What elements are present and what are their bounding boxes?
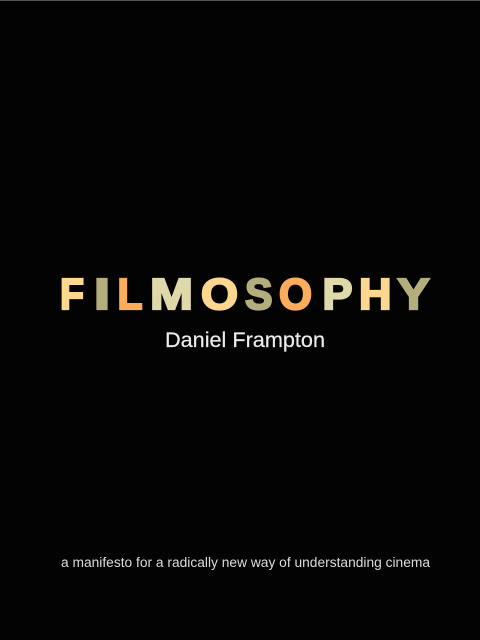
title: FILMOSOPHY: I [94,271,110,319]
title: FILMOSOPHY [60,271,430,319]
title: FILMOSOPHY: S [245,271,272,319]
author name: Daniel Frampton [165,328,325,352]
title: FILMOSOPHY: M [150,271,193,319]
title: FILMOSOPHY: P [322,271,352,319]
tagline: a manifesto for a radically new way of understanding cinema [61,555,430,570]
title: FILMOSOPHY: O [201,271,238,319]
title: FILMOSOPHY: H [359,271,392,319]
title: FILMOSOPHY: Y [398,271,430,319]
title: FILMOSOPHY: L [118,271,142,319]
title: FILMOSOPHY: F [60,271,84,319]
title: FILMOSOPHY: O [279,271,312,319]
